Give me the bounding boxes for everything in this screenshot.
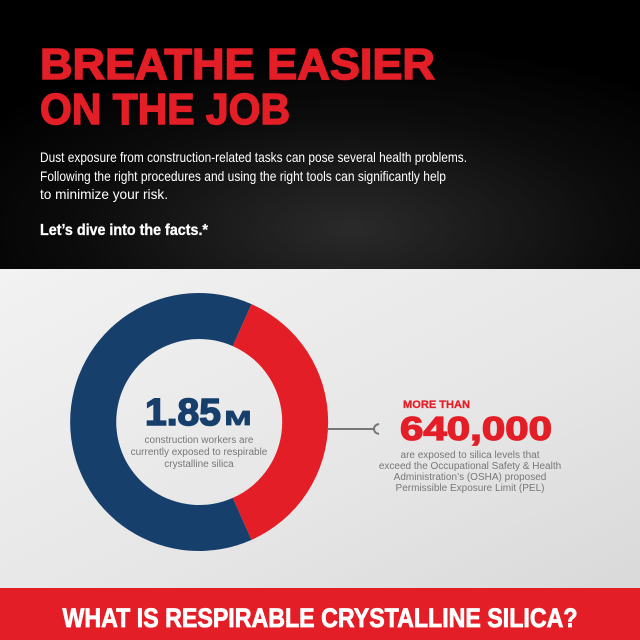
title: BREATHE EASIER <box>40 40 435 89</box>
stat: 640,000: Administration’s (OSHA) proposed <box>394 472 546 483</box>
stat: 640,000 <box>379 399 561 494</box>
header background <box>0 0 640 269</box>
facts lead-in: Let’s dive into the facts.* <box>40 222 209 239</box>
lower background <box>0 269 640 588</box>
intro paragraph: to minimize your risk. <box>40 186 168 202</box>
stat: 1.85M <box>131 392 268 470</box>
bottom banner <box>0 588 640 640</box>
intro paragraph: Following the right procedures and using the right tools can significantly help <box>40 168 446 184</box>
stat: 640,000: are exposed to silica levels that <box>401 450 540 461</box>
intro paragraph: Dust exposure from construction-related tasks can pose several health problems. <box>40 149 467 165</box>
title: ON THE JOB <box>40 85 290 134</box>
title <box>40 40 435 134</box>
stat: 640,000: Permissible Exposure Limit (PEL) <box>396 483 544 494</box>
stat: 1.85M: 1.85 <box>145 392 221 434</box>
stat: 1.85M: construction workers are <box>145 435 254 446</box>
stat: 1.85M: M <box>224 408 252 430</box>
stat: 640,000: exceed the Occupational Safety & Health <box>379 461 561 472</box>
stat: 640,000: 640,000 <box>400 410 552 447</box>
intro paragraph <box>40 149 467 202</box>
stat: 640,000: MORE THAN <box>403 399 470 411</box>
stat: 1.85M: currently exposed to respirable <box>131 447 268 458</box>
stat: 1.85M: crystalline silica <box>164 459 234 470</box>
donut chart <box>70 293 328 551</box>
connector <box>328 424 379 434</box>
